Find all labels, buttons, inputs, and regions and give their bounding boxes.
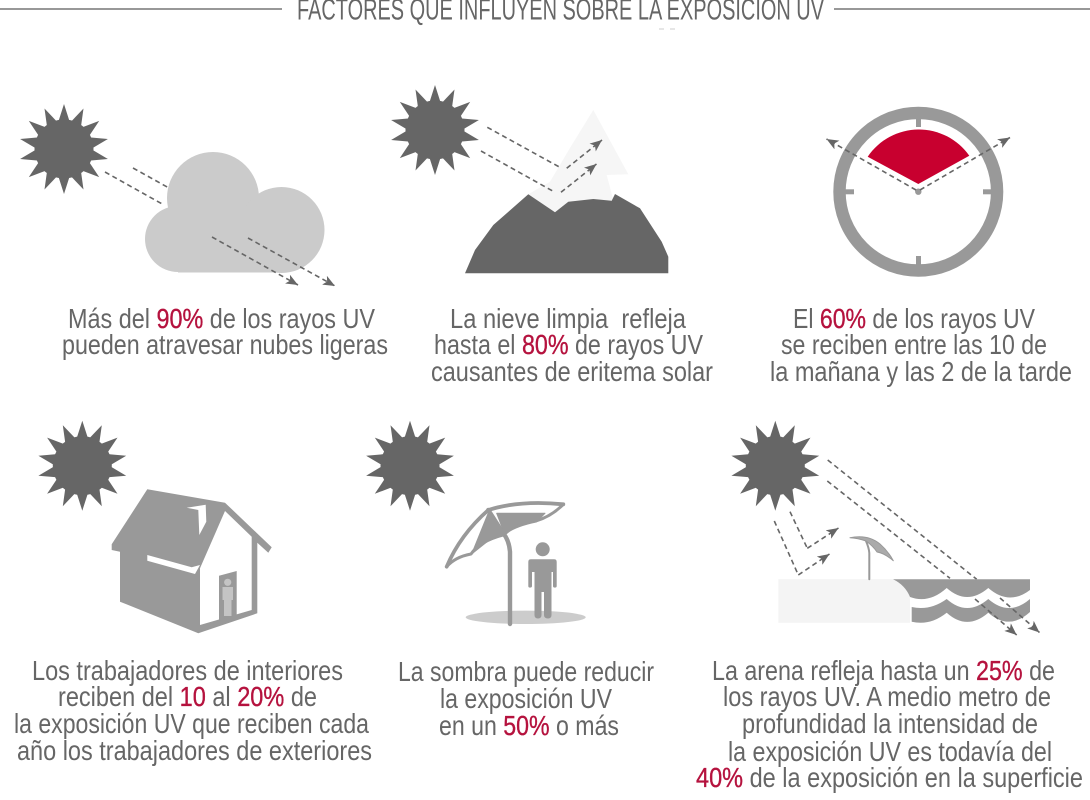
panel: nieve xyxy=(391,85,713,387)
rays on sand xyxy=(774,512,838,575)
text: sombra: la exposición UV xyxy=(440,683,612,714)
text: interiores: reciben del 10 al 20% de xyxy=(58,681,317,712)
panel: arena y agua xyxy=(696,421,1083,793)
text: sombra: La sombra puede reducir xyxy=(398,656,654,687)
icon: person xyxy=(528,542,557,618)
panel: reloj xyxy=(770,113,1072,387)
icon: water xyxy=(893,579,1030,623)
rays to water surface xyxy=(827,460,977,579)
icon: mountain xyxy=(465,194,668,273)
icon: ground shadow xyxy=(466,611,586,624)
icon: sun xyxy=(366,421,454,511)
text: arena y agua xyxy=(696,655,1083,793)
text: nieve: La nieve limpia refleja xyxy=(450,303,686,334)
text: nubes: pueden atravesar nubes ligeras xyxy=(62,329,388,360)
icon: sun xyxy=(38,421,126,511)
panel: nubes xyxy=(20,104,388,360)
icon: sun xyxy=(20,104,108,194)
text: nieve: causantes de eritema solar xyxy=(431,356,713,387)
text: interiores: Los trabajadores de interiores xyxy=(32,655,343,686)
text: arena y agua: profundidad la intensidad de xyxy=(742,708,1038,739)
icon: umbrella xyxy=(447,503,563,624)
incoming rays xyxy=(105,168,169,205)
text: interiores: año los trabajadores de exteriores xyxy=(17,735,372,766)
text: interiores xyxy=(14,655,372,766)
text: nieve: hasta el 80% de rayos UV xyxy=(434,329,703,360)
text: nieve xyxy=(431,303,713,387)
clock rays xyxy=(826,138,1010,190)
panel: sombra xyxy=(366,421,654,741)
reflected rays xyxy=(481,127,602,192)
icon: clock xyxy=(840,113,997,270)
rays under water xyxy=(975,598,1040,635)
icon: sand xyxy=(778,579,910,623)
rays through cloud xyxy=(212,237,335,286)
text: nubes: Más del 90% de los rayos UV xyxy=(68,303,375,334)
icon: snow peak xyxy=(528,110,628,212)
icon: small umbrella xyxy=(850,537,893,579)
text: sombra xyxy=(398,656,654,741)
clock sector xyxy=(868,130,969,184)
text: reloj: El 60% de los rayos UV xyxy=(793,303,1035,334)
panel: interiores xyxy=(14,421,372,766)
icon: sun xyxy=(391,85,479,175)
text: sombra: en un 50% o más xyxy=(439,710,619,741)
text: reloj xyxy=(770,303,1072,387)
icon: cloud xyxy=(145,152,324,273)
text: interiores: la exposición UV que reciben cada xyxy=(14,708,369,739)
icon: house xyxy=(112,489,272,633)
text: nubes xyxy=(62,303,388,360)
text: arena y agua: La arena refleja hasta un 25% de xyxy=(712,655,1055,686)
icon: sun xyxy=(731,421,819,511)
